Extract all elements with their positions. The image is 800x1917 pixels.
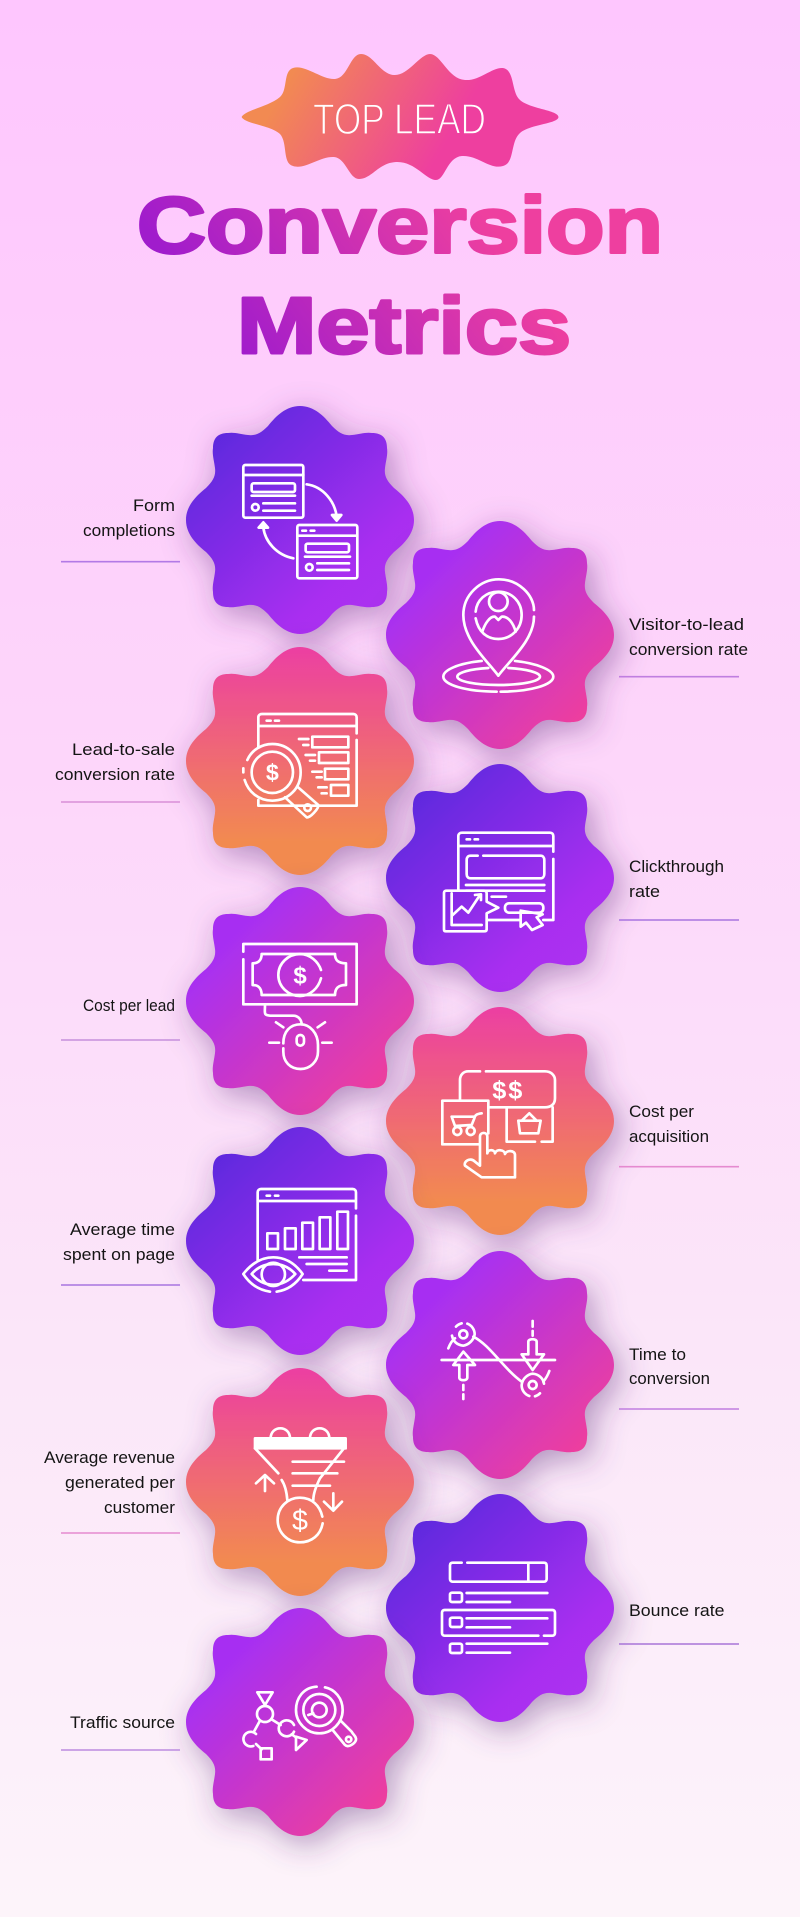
icon: shopping screens and hand: $ bbox=[508, 1077, 522, 1105]
panel: average revenue generated per customer bbox=[44, 1368, 414, 1596]
icon: curve with up and down arrows bbox=[442, 1321, 555, 1399]
title block bbox=[137, 54, 663, 370]
heading: Metrics: Metrics bbox=[237, 281, 571, 370]
blob bbox=[386, 764, 614, 992]
blob bbox=[186, 1368, 414, 1596]
label: Average revenue bbox=[44, 1448, 175, 1467]
label bbox=[61, 1220, 180, 1285]
panel: cost per acquisition bbox=[386, 1007, 739, 1235]
label bbox=[619, 857, 739, 920]
panel: average time spent on page bbox=[61, 1127, 414, 1355]
label: completions bbox=[83, 521, 175, 540]
blob bbox=[186, 1608, 414, 1836]
label bbox=[619, 1102, 739, 1167]
label: Cost per lead bbox=[83, 996, 175, 1015]
label bbox=[619, 1601, 739, 1644]
icon: shopping screens and hand bbox=[442, 1071, 555, 1177]
label: Traffic source bbox=[70, 1713, 175, 1732]
label bbox=[619, 1345, 739, 1409]
label: Average time bbox=[70, 1220, 175, 1239]
label bbox=[61, 1713, 180, 1750]
label: conversion bbox=[629, 1369, 710, 1388]
badge: top lead bbox=[242, 54, 558, 180]
icon: magnifier over report bbox=[243, 714, 357, 817]
panel: traffic source bbox=[61, 1608, 414, 1836]
blob bbox=[386, 1494, 614, 1722]
label bbox=[55, 740, 180, 802]
icon: sales funnel with coin: $ bbox=[292, 1505, 308, 1537]
icon: flow nodes and magnifier bbox=[243, 1687, 356, 1759]
panel: cost per lead bbox=[61, 887, 414, 1115]
panel: form completions bbox=[61, 406, 414, 634]
icon: shopping screens and hand: $ bbox=[492, 1077, 506, 1105]
label: conversion rate bbox=[629, 640, 748, 659]
label: customer bbox=[104, 1498, 175, 1517]
blob bbox=[186, 887, 414, 1115]
icon: list with highlighted row bbox=[442, 1563, 555, 1653]
label bbox=[61, 996, 180, 1040]
blob bbox=[186, 647, 414, 875]
label: Visitor-to-lead bbox=[629, 615, 744, 634]
heading: Conversion: Conversion bbox=[137, 180, 663, 270]
icon: magnifier over report: $ bbox=[266, 760, 279, 786]
blob bbox=[386, 521, 614, 749]
label: conversion rate bbox=[55, 765, 175, 784]
label: Lead-to-sale bbox=[72, 740, 175, 759]
icon: banknote and mouse: $ bbox=[293, 963, 307, 990]
icon: location pin with person bbox=[443, 579, 553, 692]
label bbox=[61, 496, 180, 562]
panel: clickthrough rate bbox=[386, 764, 739, 992]
label: Bounce rate bbox=[629, 1601, 724, 1620]
label: generated per bbox=[65, 1473, 175, 1492]
label bbox=[619, 615, 748, 677]
panel: visitor-to-lead conversion rate bbox=[386, 521, 748, 749]
label: Form bbox=[133, 496, 175, 515]
label: rate bbox=[629, 882, 660, 901]
panel: bounce rate bbox=[386, 1494, 739, 1722]
label: Cost per bbox=[629, 1102, 694, 1121]
label: Clickthrough bbox=[629, 857, 724, 876]
label: Time to bbox=[629, 1345, 686, 1364]
icon: sales funnel with coin bbox=[255, 1428, 346, 1542]
icon: banknote and mouse bbox=[243, 944, 357, 1069]
icon: web page with chart and cursor bbox=[444, 833, 553, 931]
label: spent on page bbox=[63, 1245, 175, 1264]
icon: two forms exchanging bbox=[243, 465, 357, 578]
blob bbox=[186, 1127, 414, 1355]
panel: lead-to-sale conversion rate bbox=[55, 647, 414, 875]
blob bbox=[386, 1007, 614, 1235]
label bbox=[44, 1448, 180, 1533]
blob bbox=[386, 1251, 614, 1479]
badge: top lead: TOP LEAD bbox=[313, 96, 486, 144]
panel: time to conversion bbox=[386, 1251, 739, 1479]
blob bbox=[186, 406, 414, 634]
icon: bar chart page with eye bbox=[243, 1189, 356, 1292]
label: acquisition bbox=[629, 1127, 709, 1146]
